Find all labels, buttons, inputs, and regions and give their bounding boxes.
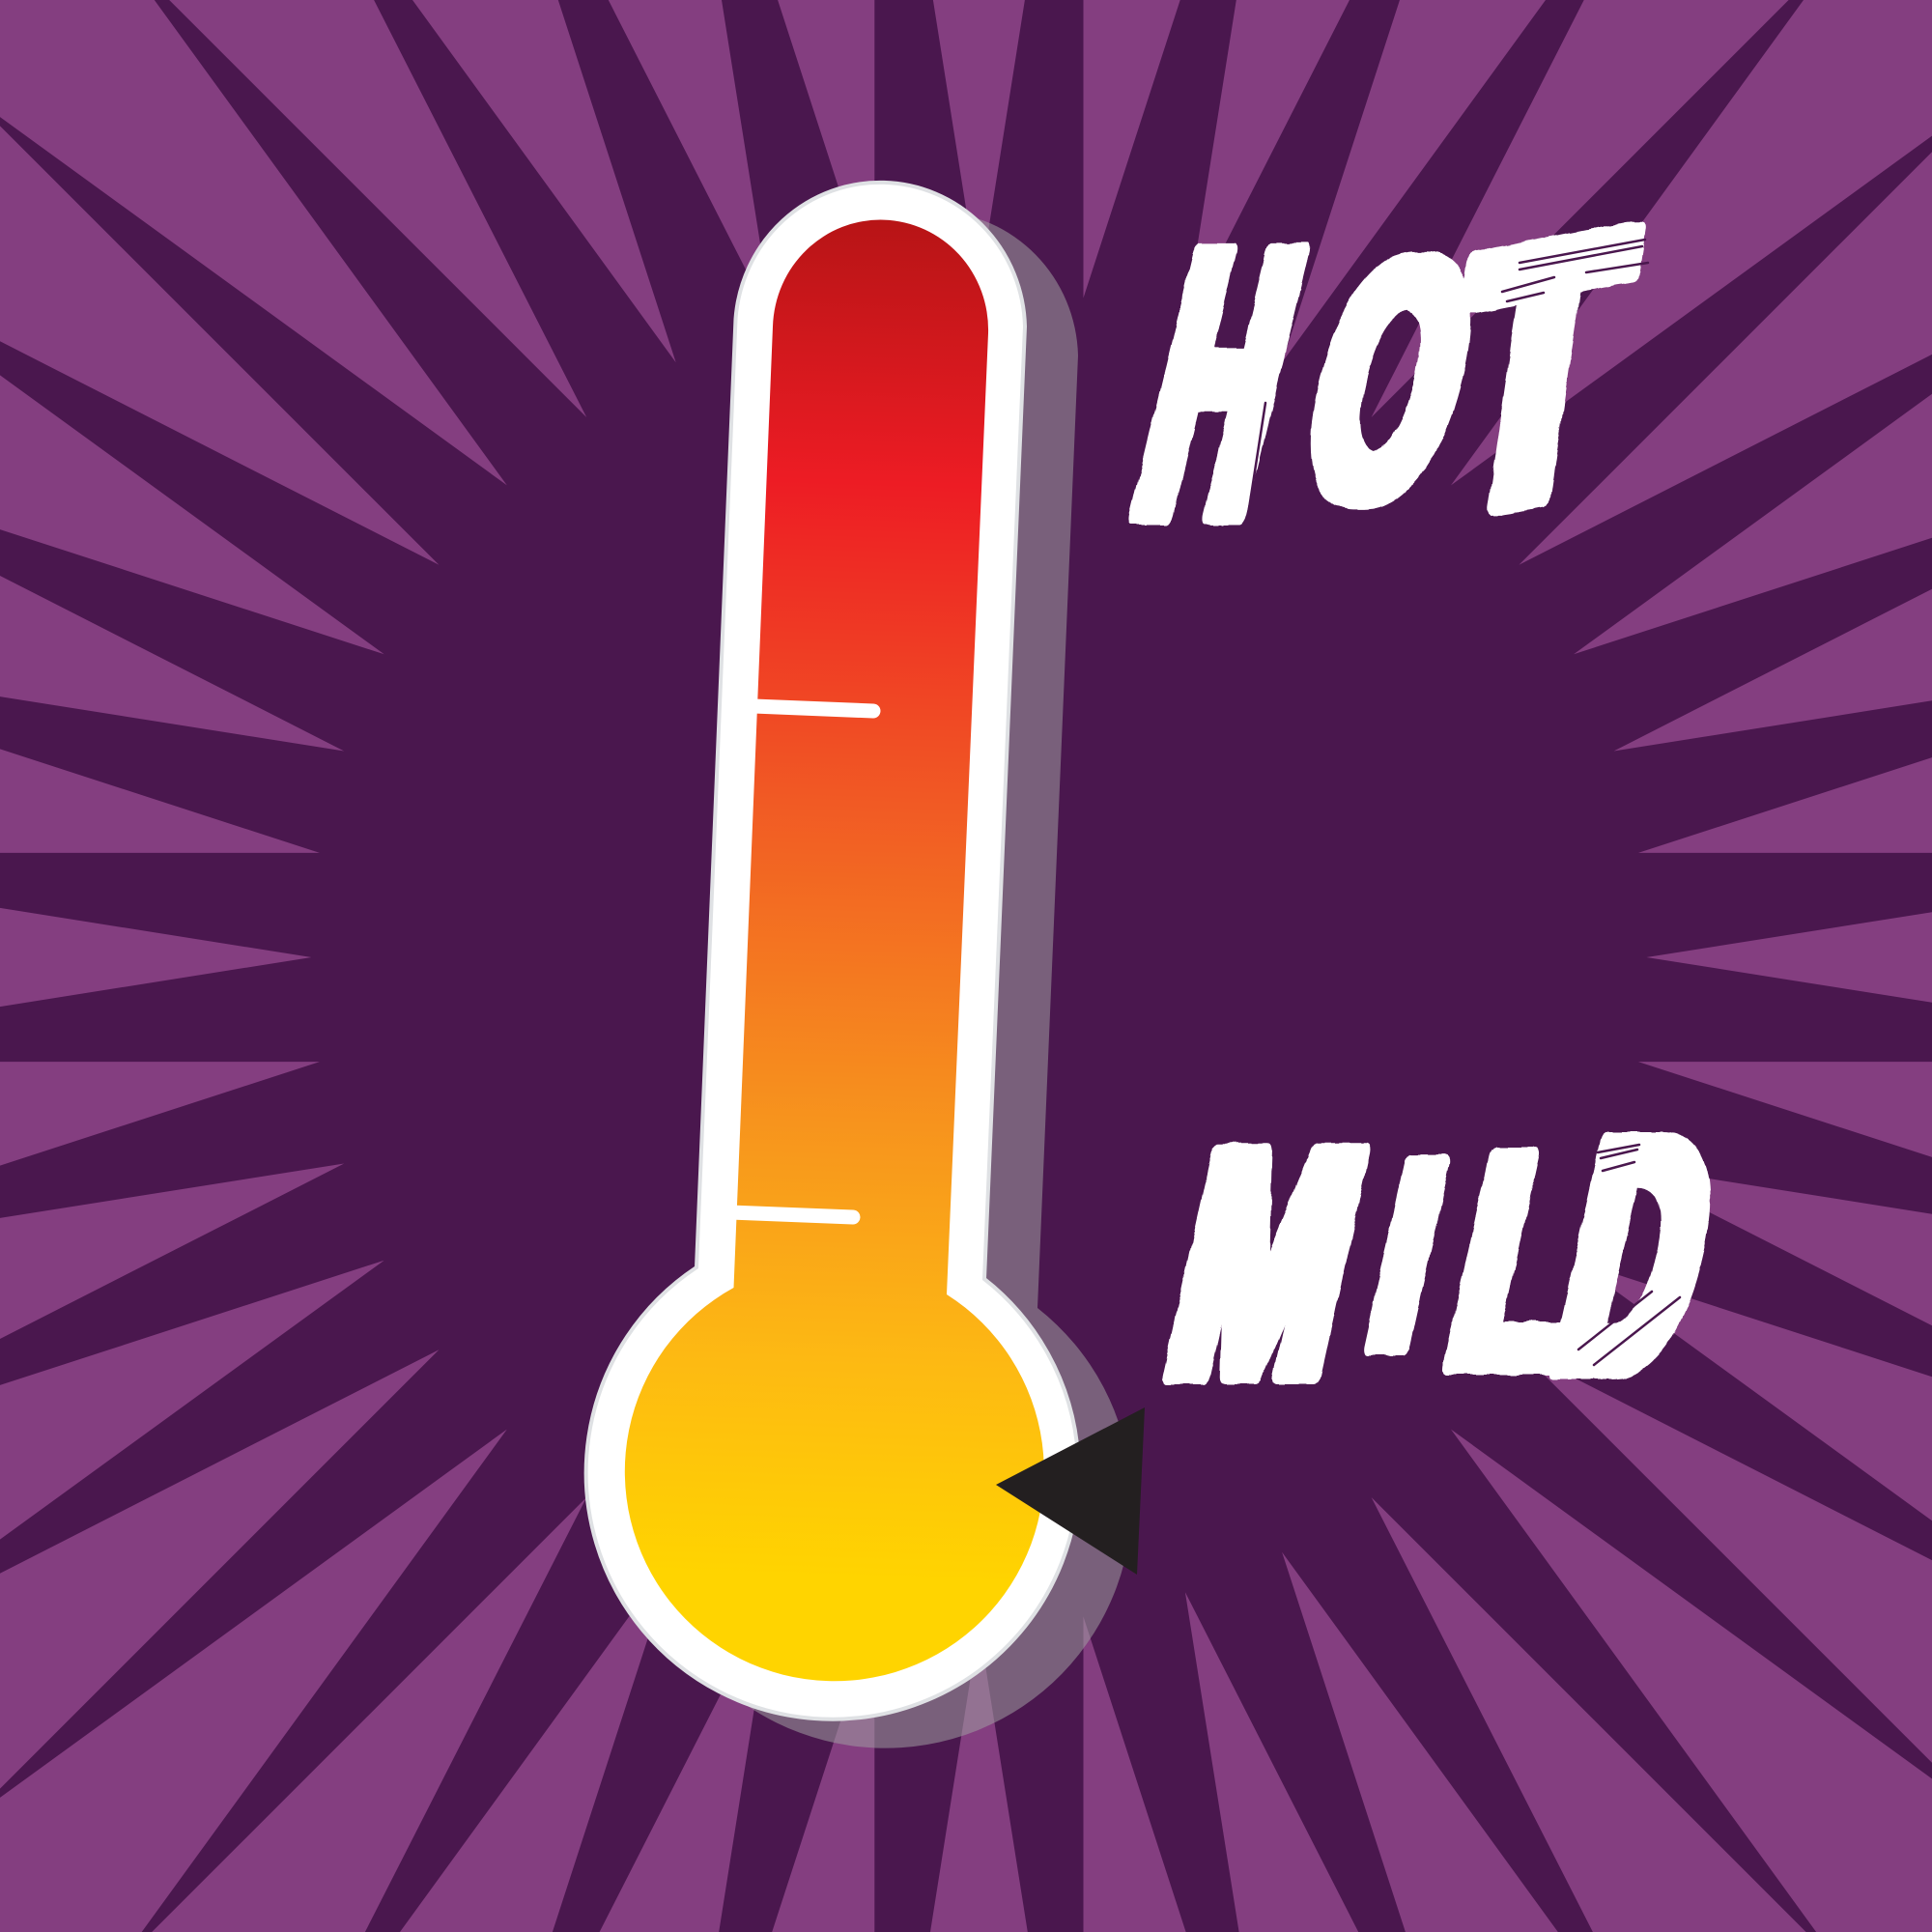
thermometer drop shadow <box>639 212 1132 1748</box>
label: MILD: M <box>1146 1083 1386 1443</box>
label: MILD: L <box>1428 1091 1616 1430</box>
label: HOT <box>1110 161 1689 597</box>
label: HOT: H <box>1110 170 1330 596</box>
lower scale tick (mild) <box>731 1212 853 1217</box>
upper scale tick (hot) <box>753 706 873 711</box>
label: MILD: I <box>1352 1107 1462 1402</box>
pointer arrow <box>996 1407 1145 1575</box>
brush streaks on HOT <box>1248 240 1648 515</box>
label: HOT: T <box>1373 161 1689 597</box>
label: MILD <box>1146 1070 1740 1443</box>
thermometer casing <box>586 183 1079 1719</box>
brush streaks on MILD <box>1578 1145 1680 1365</box>
thermometer heat gradient fill <box>625 220 1044 1681</box>
thermometer <box>586 183 1132 1748</box>
label: MILD: D <box>1534 1070 1740 1440</box>
label: HOT: O <box>1278 192 1503 569</box>
